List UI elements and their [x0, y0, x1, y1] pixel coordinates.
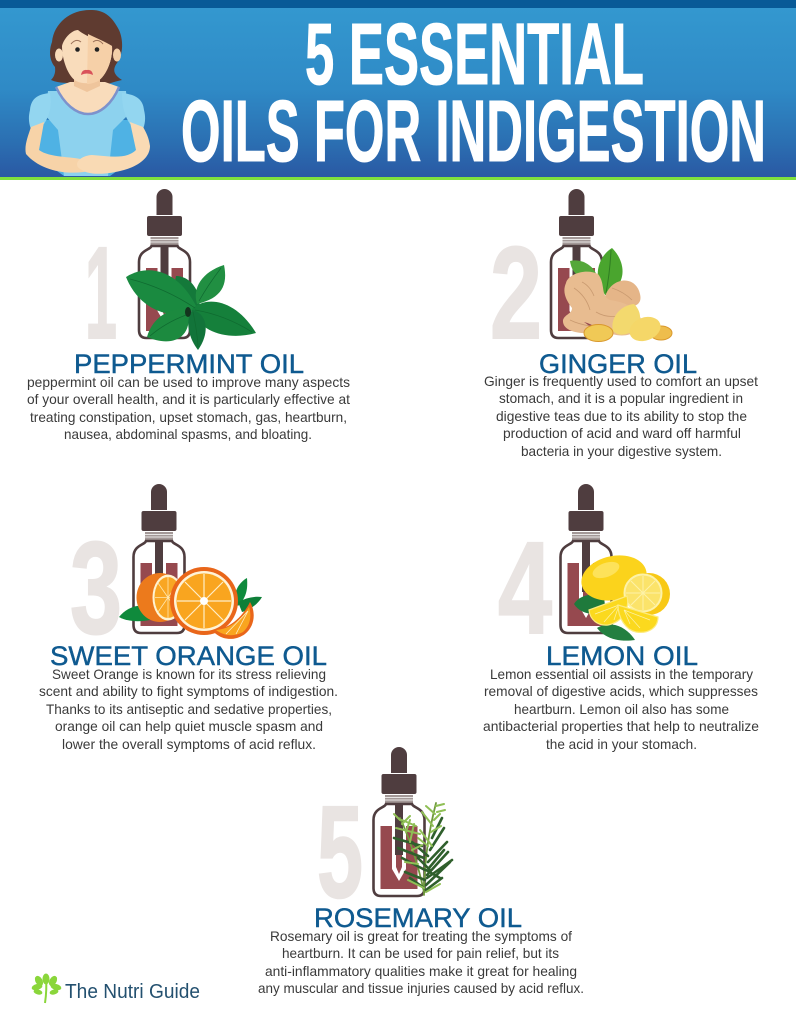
- text block: nausea, abdominal spasms, and bloating.: [64, 426, 312, 442]
- icon: woman with stomach ache: [25, 10, 150, 176]
- text block: stomach, and it is a popular ingredient in: [499, 390, 743, 406]
- icon: mint leaves: [126, 265, 256, 350]
- text block: Lemon essential oil assists in the temporary: [490, 666, 753, 682]
- panel: rosemary oil: [258, 747, 584, 996]
- text block: lower the overall symptoms of acid reflux.: [62, 736, 316, 752]
- text block: any muscular and tissue injuries caused by acid reflux.: [258, 980, 584, 996]
- text block: antibacterial properties that help to neutralize: [483, 718, 759, 734]
- text block: scent and ability to fight symptoms of indigestion.: [39, 683, 338, 699]
- text block: the acid in your stomach.: [546, 736, 697, 752]
- header banner: [0, 0, 796, 180]
- number 5: 5: [317, 778, 363, 925]
- icon: green tree: [31, 974, 62, 1003]
- heading: LEMON OIL: [546, 641, 698, 671]
- icon: dropper bottle: [134, 484, 184, 633]
- text block: production of acid and ward off harmful: [503, 425, 741, 441]
- icon: dropper bottle: [551, 189, 602, 338]
- text block: treating constipation, upset stomach, gas, heartburn,: [30, 409, 347, 425]
- logo: The Nutri Guide: [31, 974, 200, 1003]
- text block: [39, 666, 338, 752]
- text block: [484, 373, 758, 459]
- number 3: 3: [70, 514, 122, 661]
- icon: rosemary sprig: [394, 803, 452, 895]
- number 2: 2: [490, 219, 542, 366]
- text block: [258, 928, 584, 996]
- text block: Rosemary oil is great for treating the symptoms of: [270, 928, 572, 944]
- text block: peppermint oil can be used to improve many aspects: [27, 374, 350, 390]
- heading: ROSEMARY OIL: [314, 903, 522, 933]
- heading: PEPPERMINT OIL: [74, 349, 304, 379]
- text block: Thanks to its antiseptic and sedative properties,: [46, 701, 332, 717]
- panel: lemon oil: [483, 484, 759, 752]
- text block: [483, 666, 759, 752]
- text block: bacteria in your digestive system.: [521, 443, 722, 459]
- icon: dropper bottle: [374, 747, 424, 896]
- icon: dropper bottle: [139, 189, 190, 338]
- icon: ginger root: [563, 248, 672, 345]
- text block: removal of digestive acids, which suppresses: [484, 683, 758, 699]
- panel: peppermint oil: [27, 189, 350, 442]
- text block: [27, 374, 350, 442]
- number 4: 4: [498, 514, 552, 661]
- text block: Ginger is frequently used to comfort an upset: [484, 373, 758, 389]
- text block: heartburn. It can be used for pain relief, but its: [282, 945, 559, 961]
- panel: peppermint oil: 1: [85, 219, 117, 366]
- text block: anti-inflammatory qualities make it great for healing: [265, 963, 577, 979]
- icon: oranges: [119, 567, 262, 639]
- panel: ginger oil: [484, 189, 758, 459]
- text block: of your overall health, and it is particularly effective at: [27, 391, 350, 407]
- heading: SWEET ORANGE OIL: [50, 641, 327, 671]
- title: [181, 6, 766, 180]
- heading: GINGER OIL: [539, 349, 697, 379]
- icon: lemons: [574, 550, 670, 641]
- panel: sweet orange oil: [39, 484, 338, 752]
- text block: heartburn. Lemon oil also has some: [514, 701, 729, 717]
- logo text: The Nutri Guide: [65, 981, 200, 1003]
- text block: Sweet Orange is known for its stress relieving: [52, 666, 326, 682]
- text block: orange oil can help quiet muscle spasm and: [55, 718, 323, 734]
- icon: dropper bottle: [560, 484, 612, 633]
- text block: digestive teas due to its ability to stop the: [496, 408, 747, 424]
